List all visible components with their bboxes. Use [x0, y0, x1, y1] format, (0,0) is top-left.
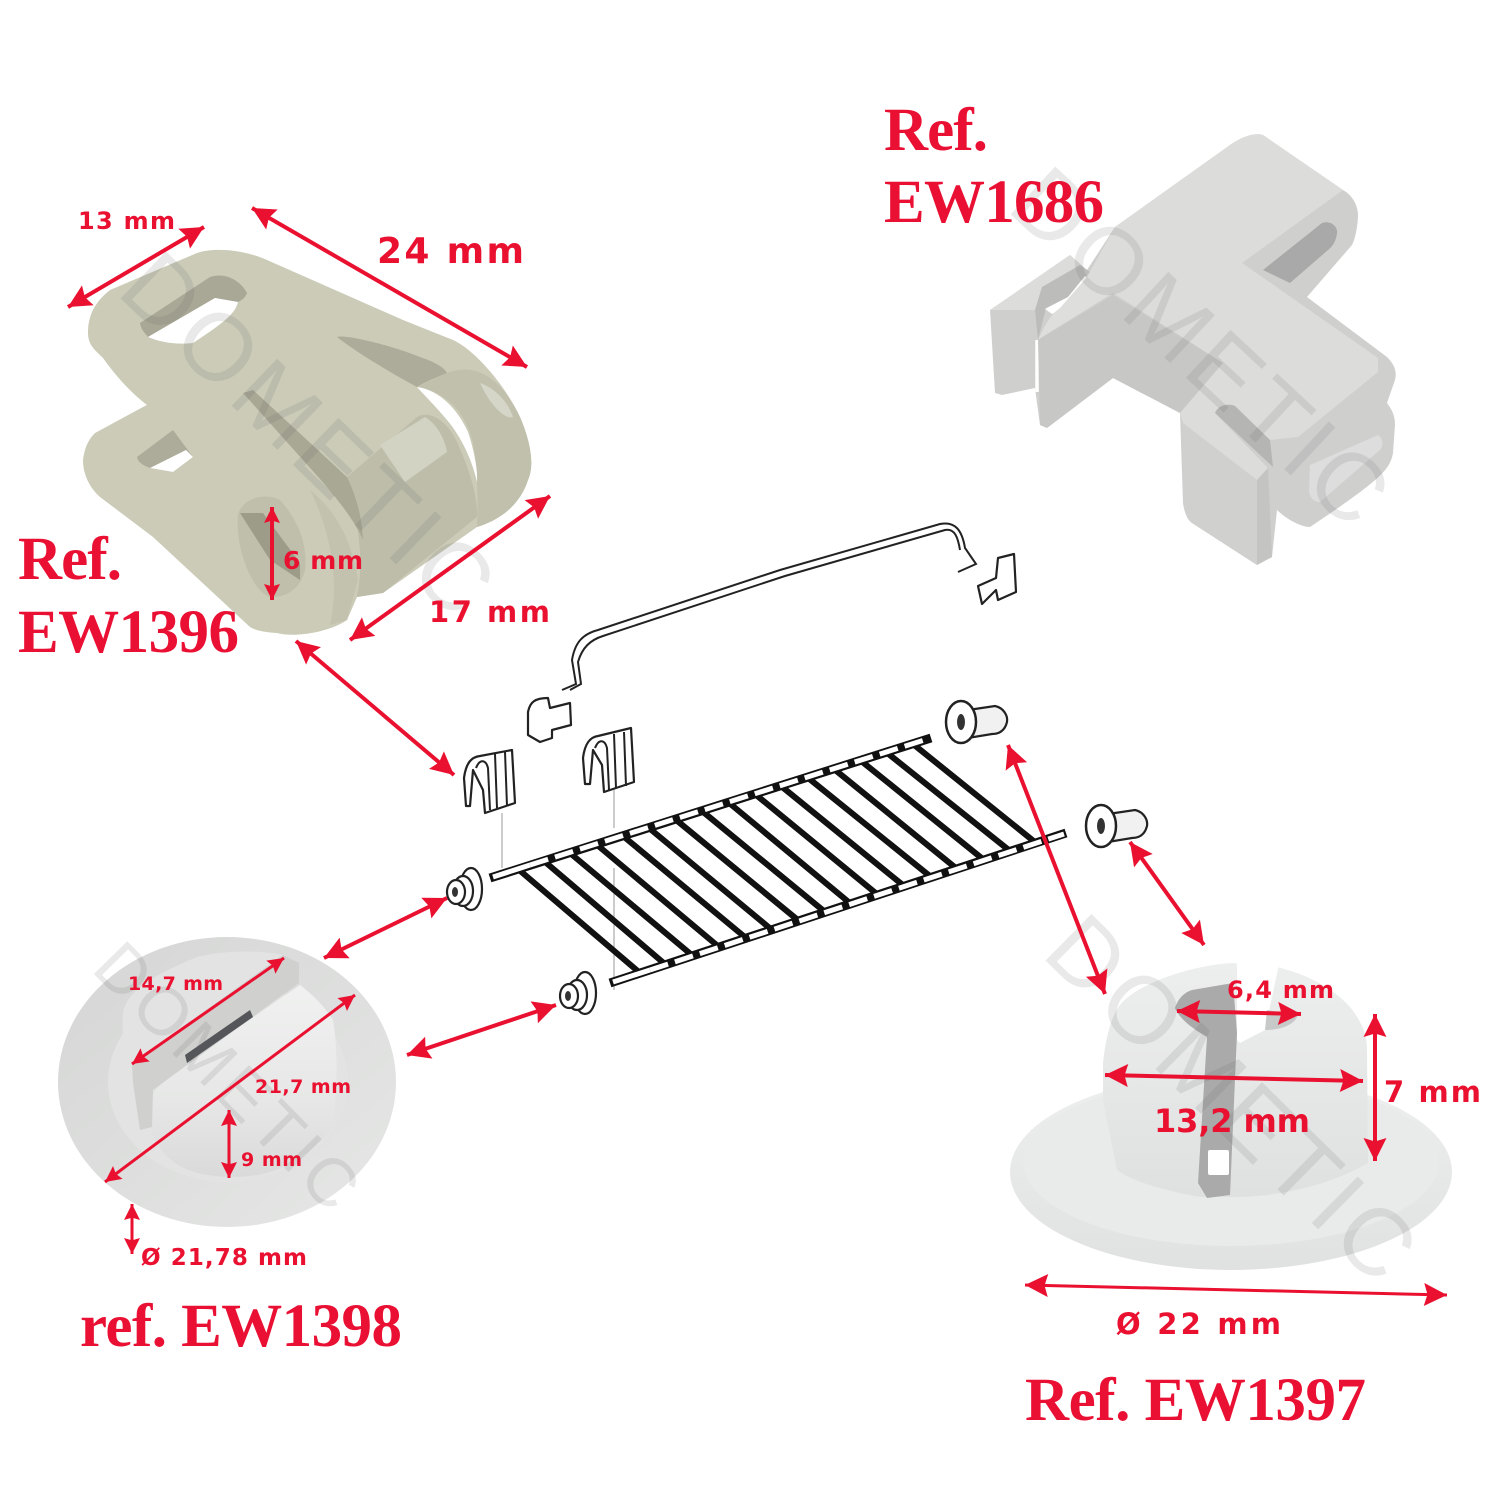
arrow: bushing to EW1397 short — [1130, 842, 1204, 945]
cylinder front half — [152, 985, 337, 1177]
bushing lower — [560, 972, 596, 1014]
arrow: 17 mm — [350, 496, 550, 640]
arrow: 6 mm — [270, 507, 274, 600]
lower lobe hole — [238, 496, 306, 597]
diagram: exploded rack assembly — [447, 523, 1147, 1014]
label: 24 mm: 24 mm — [377, 231, 524, 272]
cylinder body — [1103, 963, 1368, 1197]
reference: EW1686: EW1686 — [884, 169, 1104, 236]
arrow: 13,2 mm — [1105, 1075, 1363, 1081]
connector lines — [502, 790, 614, 990]
silhouette — [83, 250, 531, 635]
watermark: DOMETIC: DOMETIC — [79, 927, 378, 1229]
label: Ø 22 mm: Ø 22 mm — [1116, 1307, 1281, 1341]
product: EW1397 knob — [1010, 960, 1452, 1270]
label: Ø 21,78 mm: Ø 21,78 mm — [141, 1245, 307, 1271]
arrow: 22 mm — [1025, 1285, 1447, 1295]
arrow: EW1398 to lower bushing — [407, 1005, 556, 1055]
small hook top right — [978, 554, 1016, 604]
clip drawing left — [464, 750, 515, 813]
bushing top right — [946, 701, 1007, 743]
watermark: DOMETIC: DOMETIC — [1025, 894, 1441, 1307]
arrow: 6,4 mm — [1177, 1011, 1301, 1014]
bushing right — [1086, 805, 1147, 847]
arrow: EW1396 to clip — [296, 641, 454, 775]
label: 6 mm: 6 mm — [283, 546, 363, 575]
slot opening — [185, 1010, 253, 1063]
reference: EW1396: EW1396 — [18, 599, 239, 666]
flap slot — [1215, 405, 1273, 467]
upper plate slot — [337, 337, 447, 387]
front left wall — [1038, 295, 1223, 428]
lower lobe wheel — [310, 490, 358, 625]
clip drawing right — [583, 728, 634, 792]
reference: EW1397: Ref. EW1397 — [1025, 1367, 1366, 1434]
white gap between prongs — [1035, 340, 1039, 392]
label: 13 mm: 13 mm — [78, 207, 175, 235]
flange — [58, 937, 396, 1227]
watermark: DOMETIC: DOMETIC — [991, 147, 1414, 552]
flange — [1010, 1074, 1452, 1270]
reference: EW1396 — [18, 526, 239, 666]
cylinder back half — [123, 951, 283, 1065]
arrow: 14,7 mm — [132, 958, 284, 1064]
reference: EW1686: Ref. — [884, 97, 988, 164]
arrow: 7 mm — [1373, 1014, 1377, 1161]
rack lower rail — [610, 833, 1066, 983]
slot — [1175, 983, 1237, 1198]
arrow: EW1398 to upper bushing — [324, 898, 447, 958]
label: 14,7 mm: 14,7 mm — [128, 973, 223, 995]
roller — [347, 415, 477, 597]
white gap — [1237, 960, 1279, 1043]
label: 7 mm: 7 mm — [1384, 1075, 1481, 1109]
reference: EW1686 — [884, 97, 1104, 236]
white gap — [417, 387, 477, 482]
arrow: 21,7 mm — [105, 995, 355, 1182]
arrow: 13 mm — [68, 227, 204, 307]
main top face — [1087, 134, 1378, 440]
label: 21,7 mm: 21,7 mm — [255, 1076, 351, 1098]
bushing left — [447, 868, 482, 910]
wire rod — [562, 523, 976, 690]
reference: EW1398: ref. EW1398 — [80, 1293, 402, 1360]
upper lobe hole — [1263, 222, 1337, 283]
product: EW1396 clip — [83, 250, 531, 635]
label: 9 mm: 9 mm — [241, 1149, 302, 1171]
dimension arrows — [68, 208, 1447, 1295]
lower lobe hole — [1309, 435, 1382, 502]
watermark: DOMETIC: DOMETIC — [100, 232, 519, 642]
product: EW1686 clip — [990, 134, 1396, 565]
lower flap — [1183, 423, 1257, 565]
right inner wall — [1265, 1010, 1298, 1030]
slot wall — [132, 955, 299, 1130]
arrow: 9 mm — [228, 1110, 230, 1178]
label: 17 mm: 17 mm — [429, 595, 550, 629]
product: EW1398 knob — [58, 937, 396, 1227]
rack tines — [518, 744, 1036, 973]
label: 6,4 mm: 6,4 mm — [1227, 976, 1334, 1004]
watermark: DOMETIC — [79, 147, 1441, 1307]
outer loop — [417, 369, 531, 527]
lower small hole — [137, 430, 193, 472]
silhouette — [990, 134, 1396, 565]
rack upper rail — [490, 738, 931, 878]
reference: EW1396: Ref. — [18, 526, 122, 593]
window — [1208, 1150, 1229, 1175]
small hook left — [528, 698, 571, 742]
arrow: 24 mm — [252, 208, 527, 367]
label: 13,2 mm: 13,2 mm — [1154, 1102, 1310, 1140]
upper plate hole — [140, 275, 247, 337]
arrow: bushing to EW1397 long — [1008, 745, 1105, 994]
arrow: rim — [130, 1204, 134, 1254]
back left prong top — [990, 255, 1087, 310]
prong gap — [1035, 265, 1090, 340]
centre slot — [243, 390, 363, 540]
